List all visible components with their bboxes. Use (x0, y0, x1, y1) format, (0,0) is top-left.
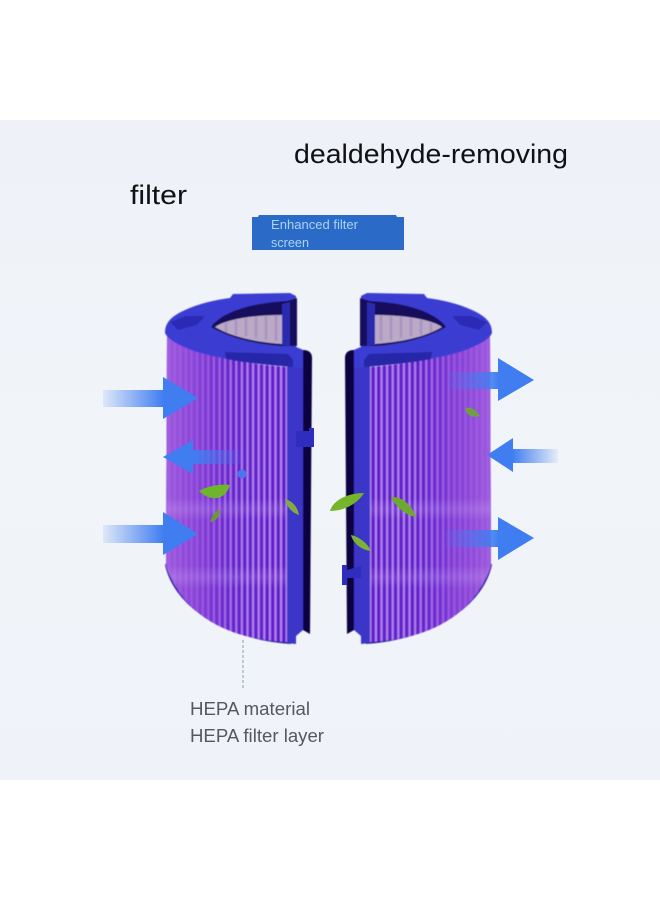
callout: enhanced filter screen (252, 215, 404, 250)
right filter half (345, 293, 492, 644)
icon: left clip tab (296, 428, 314, 447)
heading: dealdehyde-removing: dealdehyde-removing (294, 139, 568, 169)
icon: arrow left bottom inward (103, 512, 198, 555)
icon: arrow right bottom outward (445, 517, 534, 560)
panel: background (0, 120, 660, 780)
icon: arrow right top outward (448, 358, 534, 401)
icon: arrow left top inward (103, 377, 198, 419)
left filter half (165, 293, 312, 644)
callout: enhanced filter screen: Enhanced filter (271, 217, 359, 232)
icon: leaves (199, 408, 480, 551)
icon: arrow left middle outward (163, 440, 242, 474)
label: HEPA material: HEPA material (190, 699, 310, 719)
leader line (242, 640, 244, 690)
icon: right clip tab (342, 565, 361, 585)
icon: arrow right middle inward (487, 438, 558, 472)
label: HEPA filter layer: HEPA filter layer (190, 726, 324, 746)
heading: filter: filter (130, 180, 187, 210)
callout: enhanced filter screen: screen (271, 235, 309, 250)
